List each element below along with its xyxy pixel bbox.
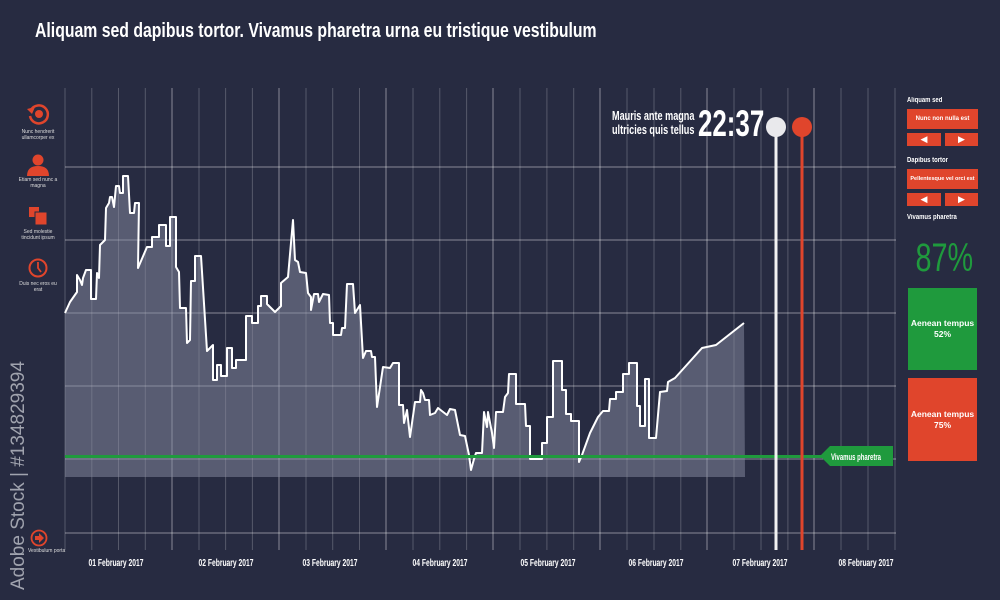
text: icon 1: Nunc hendrerit ullamcorper ex	[22, 129, 54, 141]
arrow buttons 1: ◀	[921, 134, 927, 144]
date axis labels: 05 February 2017	[520, 558, 576, 569]
label: Vivamus pharetra: Vivamus pharetra	[907, 214, 957, 221]
right control panel	[907, 97, 978, 461]
marker: red	[792, 117, 812, 550]
icon: refresh	[27, 104, 50, 125]
date axis labels	[88, 558, 894, 569]
text: icon 2: Etiam sed nunc a magna	[19, 177, 57, 189]
arrow buttons 2: ◀	[921, 194, 927, 204]
icon: clock	[28, 258, 48, 278]
arrow buttons 1: ▶	[958, 134, 965, 144]
date axis labels: 03 February 2017	[302, 558, 358, 569]
green stat box: Aenean tempus	[911, 318, 974, 328]
button: Pellentesque vel orci est	[907, 169, 978, 189]
title: Aliquam sed dapibus tortor. Vivamus pharetra urna eu tristique vestibulum	[35, 20, 597, 42]
red stat box: 75%	[934, 420, 951, 430]
watermark vertical: Adobe Stock | #134829394	[8, 361, 29, 590]
date axis labels: 08 February 2017	[838, 558, 894, 569]
button: Nunc non nulla est	[907, 109, 978, 129]
clock time: 22:37	[698, 103, 764, 144]
text: icon 4: Duis nec eros eu erat	[19, 281, 57, 293]
green stat box	[908, 288, 977, 370]
icon: person	[27, 154, 49, 176]
red stat box	[908, 378, 977, 461]
date axis labels: 01 February 2017	[88, 558, 144, 569]
arrow buttons 2: ▶	[958, 194, 965, 204]
date axis labels: 07 February 2017	[732, 558, 788, 569]
clock caption	[612, 108, 694, 137]
left icon sidebar	[19, 104, 58, 293]
big percent: 87%	[916, 236, 973, 280]
clock caption: Mauris ante magna	[612, 108, 694, 123]
arrow buttons 1	[907, 133, 978, 146]
button: Nunc non nulla est: Nunc non nulla est	[916, 116, 969, 122]
clock caption: ultricies quis tellus	[612, 122, 694, 137]
area line chart	[65, 176, 745, 477]
label: Dapibus tortor: Dapibus tortor	[907, 157, 948, 164]
green threshold line with label	[65, 446, 893, 466]
arrow buttons 2	[907, 193, 978, 206]
icon: bottom arrow: Vestibulum porta	[28, 548, 65, 554]
date axis labels: 06 February 2017	[628, 558, 684, 569]
marker: white	[766, 117, 786, 550]
button: Pellentesque vel orci est: Pellentesque vel orci est	[910, 176, 975, 182]
label: Aliquam sed: Aliquam sed	[907, 97, 942, 104]
icon: bottom arrow	[28, 530, 66, 554]
red stat box: Aenean tempus	[911, 408, 974, 418]
green threshold line with label: Vivamus pharetra	[831, 452, 882, 462]
date axis labels: 02 February 2017	[198, 558, 254, 569]
text: icon 3: Sed molestie tincidunt ipsum	[21, 229, 55, 241]
icon: squares	[29, 207, 46, 224]
date axis labels: 04 February 2017	[412, 558, 468, 569]
green stat box: 52%	[934, 329, 951, 339]
